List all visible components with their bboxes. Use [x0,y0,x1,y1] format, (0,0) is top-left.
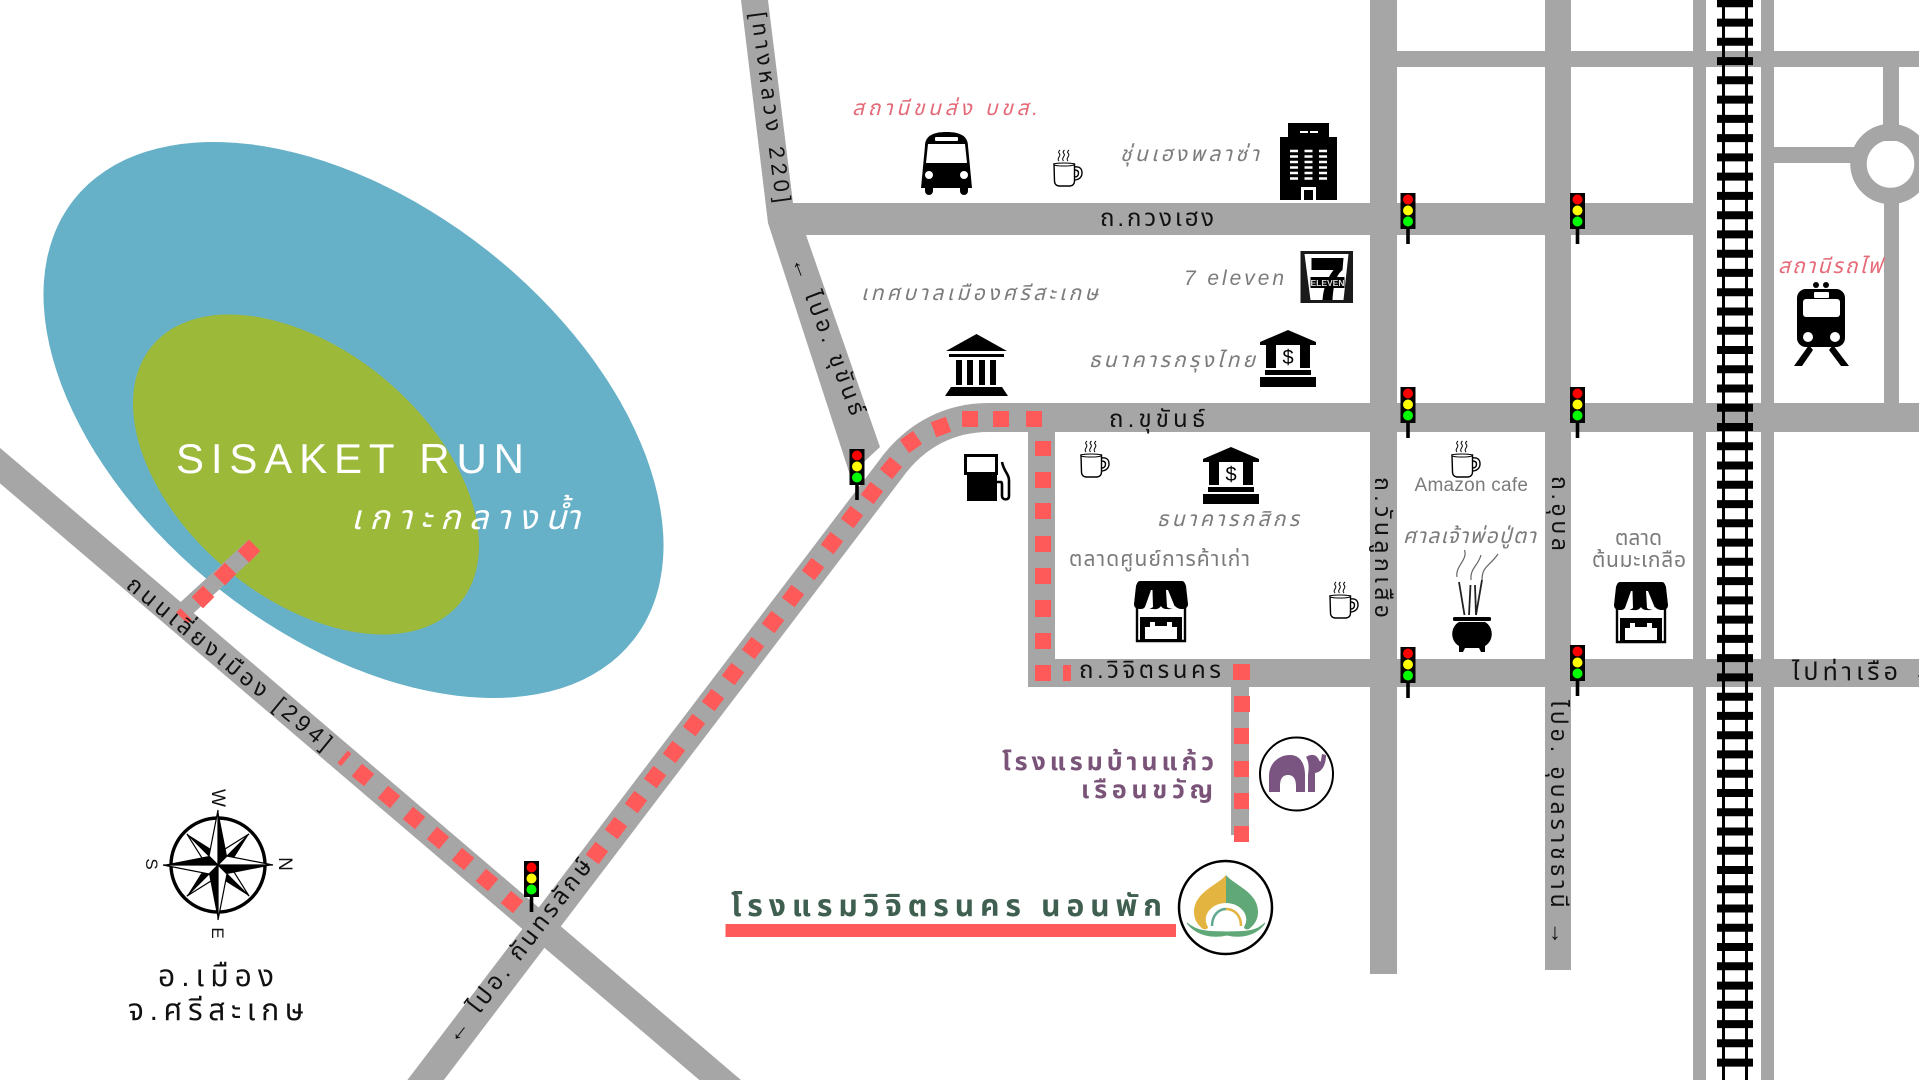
road label: bypass 294: ถนนเลี่ยงเมือง [294] [122,568,339,755]
label: Amazon cafe: Amazon cafe [1414,475,1528,496]
label: Ton Makluea market: ต้นมะเกลือ [1592,548,1686,572]
label: Chun Heng Plaza: ชุ่นเฮงพลาซ่า [1120,143,1260,167]
underline: hotel [726,924,1176,937]
icon: Ton Makluea shop [1614,582,1668,642]
label: Sisaket municipality: เทศบาลเมืองศรีสะเกษ [861,282,1100,305]
road label: Wichit Nakhon: ถ.วิจิตรนคร [1079,657,1221,684]
icon: 7-eleven logo [1300,251,1353,303]
label: Wichit Nakhon hotel: โรงแรมวิจิตรนคร นอนพัก [731,890,1162,923]
icon: bus [921,132,972,195]
icon: Amazon coffee [1452,441,1480,477]
icon: 7-eleven logo: ELEVEN [1310,278,1345,288]
icon: office building [1280,123,1337,200]
label: Ton Makluea market [1592,527,1686,572]
location text: อ.เมือง [158,960,274,993]
icon: hotel logo [1179,861,1272,954]
road label: Kwang Heng: ถ.กวงเฮง [1100,205,1214,232]
compass rose: S [142,858,161,870]
label: Krung Thai Bank: ธนาคารกรุงไทย [1089,349,1257,373]
icon: coffee near bus [1054,150,1082,186]
compass rose [142,789,295,939]
label: bus station: สถานีขนส่ง บขส. [852,97,1038,120]
location text [128,960,304,1027]
icon: incense pot [1452,550,1498,652]
railway [1717,0,1753,1080]
compass rose: W [207,789,228,807]
road label: Ubon: ถ.อุบล [1546,476,1573,551]
road label: highway 220: [ทางหลวง 220] [746,10,796,204]
icon: fuel pump [966,456,1009,501]
island: green land [73,251,539,698]
subtitle: island: เกาะกลางน้ำ [351,494,581,537]
title: Sisaket Run: SISAKET RUN [176,435,524,482]
traffic lights [524,193,1585,912]
road label: to Ubon Ratchathani: ไปอ. อุบลราชธานี → [1545,699,1572,945]
road label: Wan Luk Suea: ถ.วันลูกเสือ [1368,477,1396,618]
icon: Kasikorn bank [1203,447,1259,504]
island: lake [0,30,767,810]
label: old trade center market: ตลาดศูนย์การค้าเก่า [1069,547,1250,572]
icon: Krung Thai bank [1260,330,1316,387]
compass rose: E [208,927,227,939]
compass rose: N [274,857,295,871]
road label: to Kantharalak: ← ไปอ. กันทรลักษ์ [439,854,598,1049]
label: 7 eleven: 7 eleven [1184,267,1284,290]
icon: coffee near Wan Luk Suea [1330,582,1358,618]
road label: Khukhan: ถ.ขุขันธ์ [1109,406,1205,434]
label: Kasikorn Bank: ธนาคารกสิกร [1157,508,1301,531]
icon: market shop [1134,581,1188,642]
label: Ton Makluea market: ตลาด [1615,527,1662,550]
label: Baan Kaew Ruean Khwan hotel: โรงแรมบ้านแก้ว [1002,748,1214,776]
label: shrine: ศาลเจ้าพ่อปู่ตา [1403,525,1537,549]
label: Baan Kaew Ruean Khwan hotel [1002,748,1214,804]
location text: จ.ศรีสะเกษ [128,994,304,1027]
icon: elephant logo [1260,738,1333,810]
icon: coffee at Khukhan [1081,441,1109,477]
route: red dashed markers [176,411,1250,913]
icon: municipality building [945,334,1008,396]
label: train station: สถานีรถไฟ [1778,255,1886,278]
label: Baan Kaew Ruean Khwan hotel: เรือนขวัญ [1081,776,1213,804]
icon: train [1794,282,1849,366]
road label: to Khukhan: ← ไปอ. ขุขันธ์ [785,252,871,419]
